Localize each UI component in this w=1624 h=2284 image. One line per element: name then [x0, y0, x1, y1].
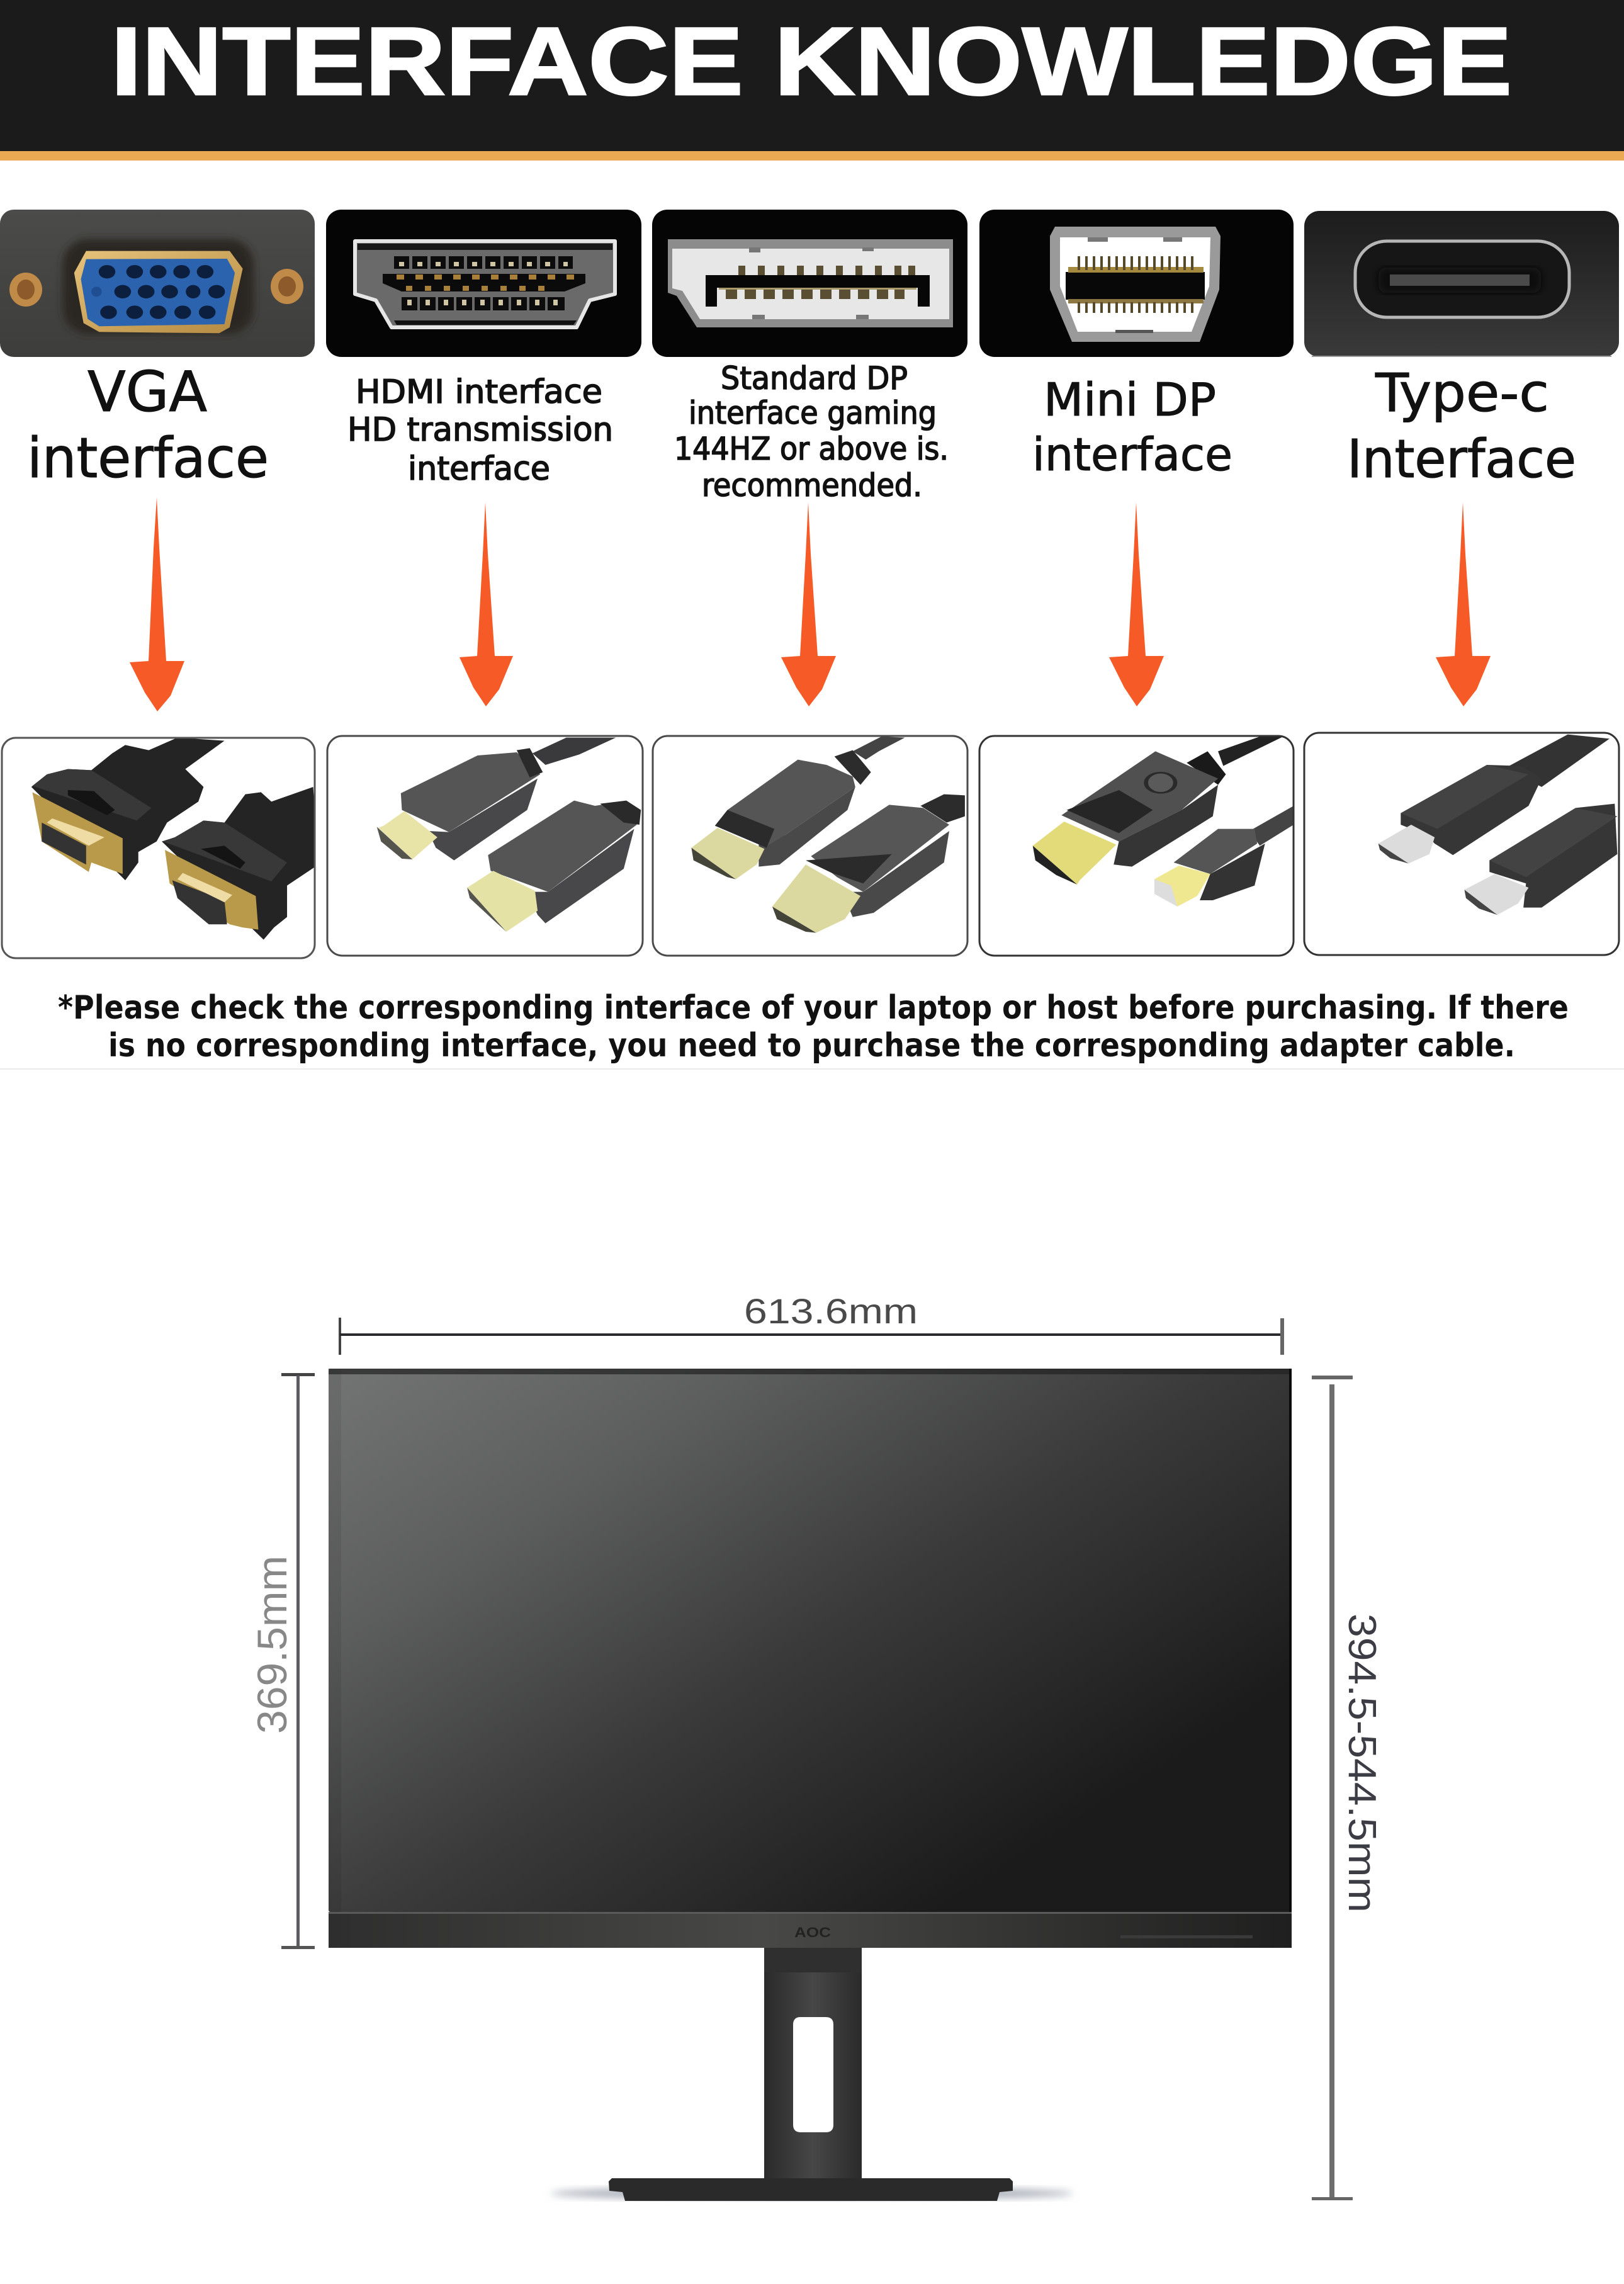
Type-C connector B [1464, 804, 1617, 915]
Mini DP connector large [1033, 737, 1283, 885]
arrow: Mini DP [1109, 502, 1164, 706]
cable panel: Mini DP [979, 736, 1294, 956]
brand logo: AOC [794, 1925, 831, 1940]
label: HDMI interface: interface [408, 450, 550, 488]
stand neck [764, 1948, 862, 2178]
note text: *Please check the corresponding interface of your laptop or host before purchasing. If there [58, 989, 1569, 1027]
label: Standard DP [674, 360, 949, 504]
Mini DP pins [1078, 256, 1193, 313]
header banner [0, 0, 1624, 161]
port panel: standard DP [652, 210, 967, 357]
height dimension: 369.5mm: 369.5mm [249, 1556, 295, 1734]
label: Mini DP interface: Mini DP [1044, 373, 1216, 426]
label: VGA interface: interface [27, 426, 269, 490]
label: VGA interface [27, 359, 269, 490]
label: HDMI interface: HDMI interface [356, 373, 602, 411]
HDMI pins [394, 256, 574, 310]
arrow: DP [781, 502, 836, 706]
stand shadow [551, 2186, 1073, 2200]
port panel: Type-C [1304, 211, 1619, 357]
height dimension: 394.5-544.5mm [1312, 1376, 1384, 2200]
DP connector B [772, 794, 965, 933]
note text: is no corresponding interface, you need to purchase the corresponding adapter cable. [108, 1027, 1515, 1065]
label: Standard DP: 144HZ or above is. [674, 431, 949, 467]
port panel: Mini DP [979, 210, 1294, 357]
cable panel: VGA [2, 738, 319, 958]
label: Type-c Interface [1347, 362, 1576, 490]
cable panel: HDMI [327, 736, 643, 956]
note text [58, 989, 1569, 1065]
VGA connector A [31, 738, 225, 880]
Type-C connector A [1379, 735, 1610, 864]
HDMI connector B [467, 801, 641, 932]
arrow: HDMI [460, 502, 513, 706]
HDMI connector A [377, 738, 616, 861]
label: Mini DP interface: interface [1032, 428, 1232, 481]
Mini DP connector small [1154, 806, 1294, 907]
label: Standard DP: Standard DP [721, 360, 908, 397]
screen [329, 1369, 1292, 1912]
width dimension: 613.6mm [339, 1291, 1284, 1355]
label: Type-c Interface: Type-c [1375, 362, 1549, 424]
title: INTERFACE KNOWLEDGE [111, 8, 1512, 115]
VGA connector B [162, 787, 319, 940]
cable panel: standard DP [653, 736, 967, 956]
DP pins [719, 247, 916, 319]
label: Type-c Interface: Interface [1347, 428, 1576, 490]
label: HDMI interface [347, 373, 613, 488]
stand base [609, 2178, 1013, 2201]
arrow: VGA [130, 497, 184, 711]
label: HDMI interface: HD transmission [347, 411, 613, 449]
label: Mini DP interface [1032, 373, 1232, 481]
monitor [329, 1369, 1292, 2201]
cable panel: Type-C [1304, 733, 1619, 955]
port panel: HDMI [326, 210, 641, 357]
label: Standard DP: interface gaming [689, 395, 937, 431]
label: Standard DP: recommended. [702, 467, 922, 504]
DP connector A [691, 737, 905, 879]
height dimension: 369.5mm [249, 1373, 315, 1949]
arrow: Type-C [1436, 502, 1491, 706]
bezel chin [329, 1912, 1292, 1948]
label: VGA interface: VGA [87, 359, 207, 424]
port panel: VGA [0, 210, 315, 357]
icon: screws [9, 269, 303, 307]
width dimension: 613.6mm: 613.6mm [744, 1291, 918, 1331]
height dimension: 394.5-544.5mm: 394.5-544.5mm [1340, 1614, 1384, 1913]
